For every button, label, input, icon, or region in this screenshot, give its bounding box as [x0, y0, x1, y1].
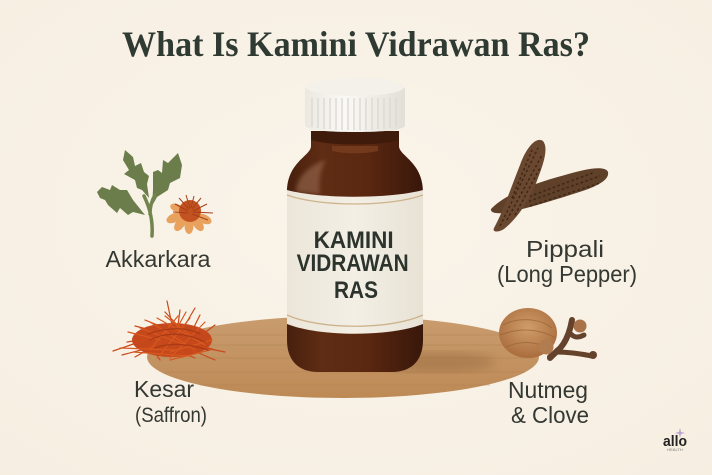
leaves	[97, 150, 182, 236]
bottle label	[287, 190, 423, 334]
label text: RAS	[334, 277, 378, 304]
logo: allo health	[663, 428, 687, 452]
bottle cap	[305, 78, 405, 132]
label: pippali: Pippali	[526, 236, 604, 262]
label: long pepper: (Long Pepper)	[497, 261, 637, 287]
neck ring	[311, 131, 399, 144]
glass highlight	[296, 160, 326, 194]
bottle	[287, 78, 495, 372]
label: saffron: (Saffron)	[135, 404, 207, 427]
label: clove: & Clove	[511, 402, 589, 428]
logo: allo health: HEALTH	[667, 447, 683, 452]
label: nutmeg: Nutmeg	[508, 377, 588, 403]
title: What Is Kamini Vidrawan Ras?	[122, 24, 590, 64]
icon: pippali long pepper	[491, 140, 608, 232]
nutmeg	[499, 308, 557, 358]
label text: VIDRAWAN	[297, 250, 409, 277]
wooden table ellipse	[147, 316, 539, 398]
logo: allo health: allo	[663, 433, 687, 450]
label: kesar: Kesar	[134, 376, 194, 402]
icon: saffron threads	[113, 301, 225, 360]
icon: nutmeg and clove	[499, 308, 597, 359]
bottle glass	[287, 131, 423, 372]
bottle shadow	[385, 352, 495, 372]
icon: akkarkara leaves and flower	[97, 150, 213, 236]
clove	[550, 320, 592, 358]
flower petals	[165, 195, 213, 234]
label text: KAMINI	[314, 227, 394, 254]
label: akkarkara: Akkarkara	[106, 246, 211, 272]
